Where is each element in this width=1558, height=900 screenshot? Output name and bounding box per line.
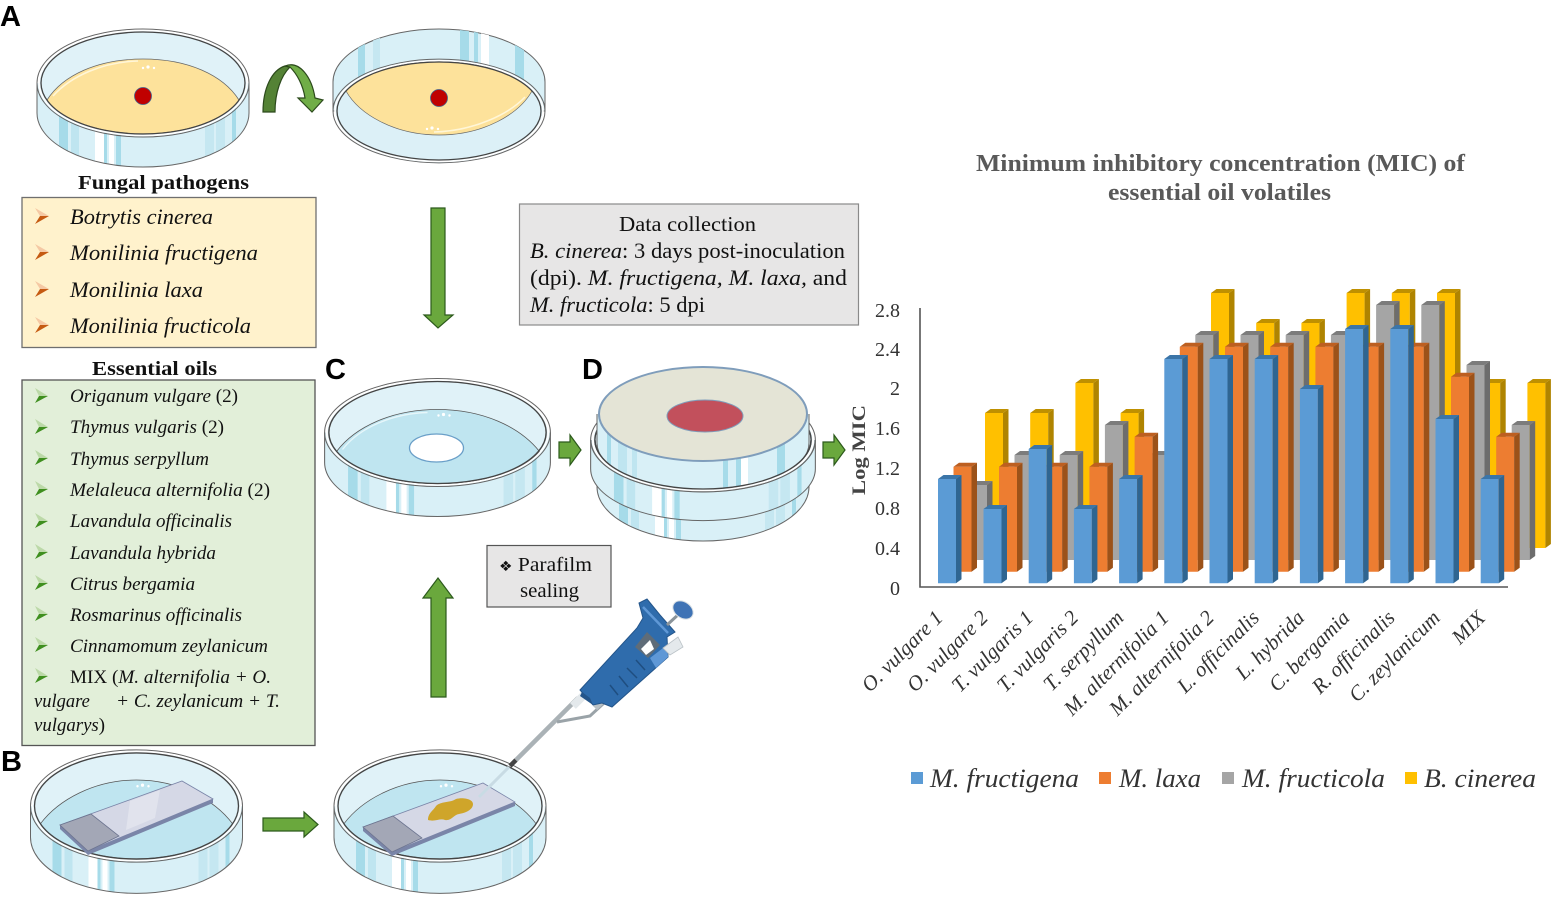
panel: essential oils list: Cinnamomum zeylanicum — [70, 637, 268, 657]
chart legend: B. cinerea — [1424, 764, 1536, 793]
heading: Fungal pathogens: Fungal pathogens — [78, 172, 249, 194]
bar chart: log MIC by essential oil — [849, 289, 1551, 721]
icon: pipette — [479, 597, 697, 797]
chart legend: M. laxa — [1118, 764, 1201, 793]
x axis labels: O. vulgare 1 — [856, 606, 948, 697]
panel: essential oils list: Rosmarinus officinalis — [69, 606, 242, 626]
y axis labels: 0.4 — [875, 538, 900, 560]
x axis labels: M. alternifolia 2 — [1103, 605, 1219, 721]
panel: fungal pathogens list: Monilinia laxa — [69, 277, 203, 302]
x axis labels: T. vulgaris 2 — [992, 605, 1083, 697]
petri dish C: medium with central hole — [325, 378, 550, 522]
x axis labels: M. alternifolia 1 — [1058, 606, 1174, 721]
panel: essential oils list: vulgarys) — [34, 716, 105, 736]
panel letter B: B — [1, 746, 22, 778]
x axis labels: R. officinalis — [1306, 606, 1400, 699]
arrow: down from plate to step C — [424, 208, 453, 328]
chart legend — [911, 764, 1536, 793]
panel: fungal pathogens list: Monilinia fructicola — [69, 313, 251, 338]
x axis labels: C. bergamia — [1264, 606, 1354, 696]
callout: parafilm sealing: sealing — [520, 580, 579, 602]
chart legend: M. fructicola — [1241, 764, 1385, 793]
x axis labels: L. officinalis — [1171, 606, 1264, 698]
chart title: essential oil volatiles — [1108, 180, 1331, 206]
panel: essential oils list — [22, 380, 315, 746]
x axis labels: O. vulgare 2 — [902, 605, 993, 697]
x axis labels: T. serpyllum — [1038, 606, 1128, 696]
x axis labels: C. zeylanicum — [1344, 606, 1445, 707]
panel: essential oils list: vulgare — [34, 692, 90, 712]
panel: fungal pathogens list — [22, 198, 316, 348]
heading: Essential oils: Essential oils — [92, 358, 217, 380]
arrow: up from step B to C — [423, 578, 453, 697]
y axis labels: 1.2 — [875, 458, 900, 480]
series: M. fructicola bars — [969, 301, 1535, 560]
microscope slide — [60, 781, 213, 855]
panel letter D: D — [582, 354, 603, 386]
chart title: Minimum inhibitory concentration (MIC) of — [976, 151, 1466, 177]
panel: essential oils list: MIX (M. alternifolia + O. — [70, 668, 271, 688]
panel: fungal pathogens list: Botrytis cinerea — [70, 204, 213, 229]
microscope slide with oil — [363, 783, 515, 856]
chart axes — [920, 308, 1508, 587]
panel: fungal pathogens list: Monilinia fructigena — [69, 240, 258, 265]
x axis labels — [856, 605, 1491, 721]
chart title — [976, 151, 1466, 206]
y axis labels: 2.4 — [875, 339, 900, 361]
series: B. cinerea bars — [985, 289, 1551, 548]
callout: data collection — [520, 204, 858, 325]
panel: essential oils list: Lavandula officinalis — [69, 512, 232, 532]
y axis labels: 0 — [890, 578, 900, 600]
arrow: D to chart — [823, 435, 845, 465]
series: M. laxa bars — [954, 343, 1520, 572]
petri dish: flipped, agar on top — [333, 21, 545, 163]
chart legend: M. fructigena — [929, 764, 1079, 793]
panel: essential oils list: Thymus serpyllum — [70, 450, 209, 470]
x axis labels: L. hybrida — [1230, 606, 1309, 685]
panel letter A: A — [0, 1, 21, 33]
x axis labels: MIX — [1446, 605, 1491, 650]
callout: data collection: (dpi). M. fructigena, M. laxa, and — [530, 265, 847, 290]
callout: data collection: B. cinerea: 3 days post-inoculation — [530, 238, 845, 263]
petri dish B right: slide with oil drop — [334, 750, 546, 900]
curved flip arrow — [263, 65, 323, 112]
callout: parafilm sealing — [487, 546, 611, 607]
callout: data collection: Data collection — [619, 212, 757, 236]
panel: essential oils list: Thymus vulgaris (2) — [70, 418, 224, 438]
callout: data collection: M. fructicola: 5 dpi — [529, 292, 705, 317]
panel: essential oils list: Origanum vulgare (2) — [70, 387, 238, 407]
arrow: B left to B right — [263, 812, 318, 837]
panel: essential oils list: + C. zeylanicum + T. — [116, 692, 280, 712]
callout: parafilm sealing: ❖ Parafilm — [499, 554, 592, 576]
y axis title: Log MIC — [849, 405, 870, 495]
panel: essential oils list: Lavandula hybrida — [69, 544, 216, 564]
y axis labels: 1.6 — [875, 418, 900, 440]
x axis labels: T. vulgaris 1 — [947, 606, 1038, 697]
arrow: C to D — [559, 435, 581, 465]
y axis labels: 2 — [890, 378, 900, 400]
petri dish: inoculated agar, lid up — [37, 29, 249, 173]
petri dish B left: clean slide — [30, 750, 242, 900]
y axis labels: 0.8 — [875, 498, 900, 520]
panel: essential oils list: Melaleuca alternifolia (2) — [69, 481, 270, 501]
y axis labels: 2.8 — [875, 300, 900, 322]
series: M. fructigena bars — [938, 325, 1504, 583]
y axis labels — [875, 300, 900, 600]
panel: essential oils list: Citrus bergamia — [70, 575, 195, 595]
panel letter C: C — [325, 354, 346, 386]
petri dish D: stacked sealed plates — [591, 367, 815, 547]
